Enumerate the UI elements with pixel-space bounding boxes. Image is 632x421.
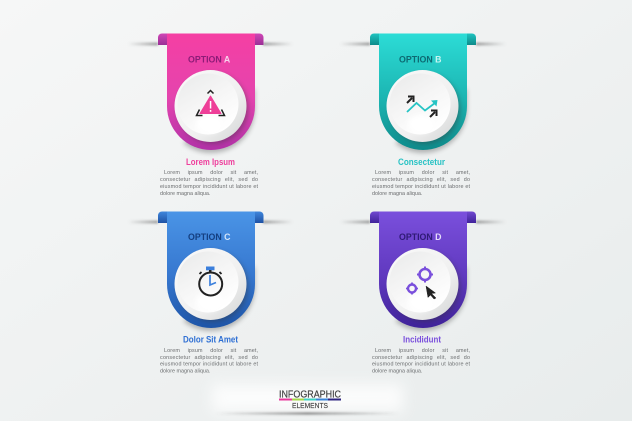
text A: dolore magna aliqua. [160,191,210,197]
title B: Consectetur [398,157,445,167]
text C: consectetur adipiscing elit, sed do [160,355,258,361]
ribbon tabs D [370,212,476,223]
disc B [386,70,460,144]
text D: Lorem ipsum dolor sit amet, [375,348,470,354]
tab shadows B [340,42,506,46]
label B: OPTION B [399,54,442,64]
title A: Lorem Ipsum [186,157,235,167]
text C [160,348,258,374]
ribbon tabs A [158,34,264,45]
ribbon B [379,34,467,150]
disc D [386,248,460,322]
disc A [174,70,248,144]
text B: dolore magna aliqua. [372,191,422,197]
text B: Lorem ipsum dolor sit amet, [375,170,470,176]
text A: Lorem ipsum dolor sit amet, [164,170,258,176]
rainbow bar [279,398,341,400]
text C: dolore magna aliqua. [160,368,210,374]
icon: stopwatch [199,266,222,296]
icon: trend arrows [407,96,438,117]
text B: consectetur adipiscing elit, sed do [372,177,470,183]
label D: OPTION D [399,232,442,242]
tab shadows A [128,42,293,46]
ribbon tabs C [158,212,264,223]
text A [160,170,258,197]
footer band [212,384,403,414]
text D: dolore magna aliqua. [372,368,422,374]
logo: infographic elements: INFOGRAPHIC [279,389,341,400]
icon: warning triangle [196,90,224,116]
tab shadows D [340,220,506,224]
text B [372,170,470,197]
logo: infographic elements: ELEMENTS [292,401,328,410]
panel: option A [128,34,293,197]
ribbon D [379,212,467,328]
disc C [174,248,248,322]
text C: eiusmod tempor incididunt ut labore et [160,362,258,368]
text B: eiusmod tempor incididunt ut labore et [372,184,470,190]
icon: targets and cursor [406,266,436,299]
label A: OPTION A [188,54,231,64]
panel: option C [128,212,293,374]
tab shadows C [128,220,293,224]
text A: consectetur adipiscing elit, sed do [160,177,258,183]
logo: infographic elements [279,389,341,410]
label C: OPTION C [188,232,231,242]
text C: Lorem ipsum dolor sit amet, [164,348,258,354]
title C: Dolor Sit Amet [183,334,238,344]
panel: option D [340,212,506,374]
text D [372,348,470,374]
text D: eiusmod tempor incididunt ut labore et [372,362,470,368]
text D: consectetur adipiscing elit, sed do [372,355,470,361]
panel: option B [340,34,506,197]
ribbon tabs B [370,34,476,45]
title D: Incididunt [403,334,441,344]
text A: eiusmod tempor incididunt ut labore et [160,184,258,190]
ribbon C [167,212,255,328]
ribbon A [167,34,255,150]
